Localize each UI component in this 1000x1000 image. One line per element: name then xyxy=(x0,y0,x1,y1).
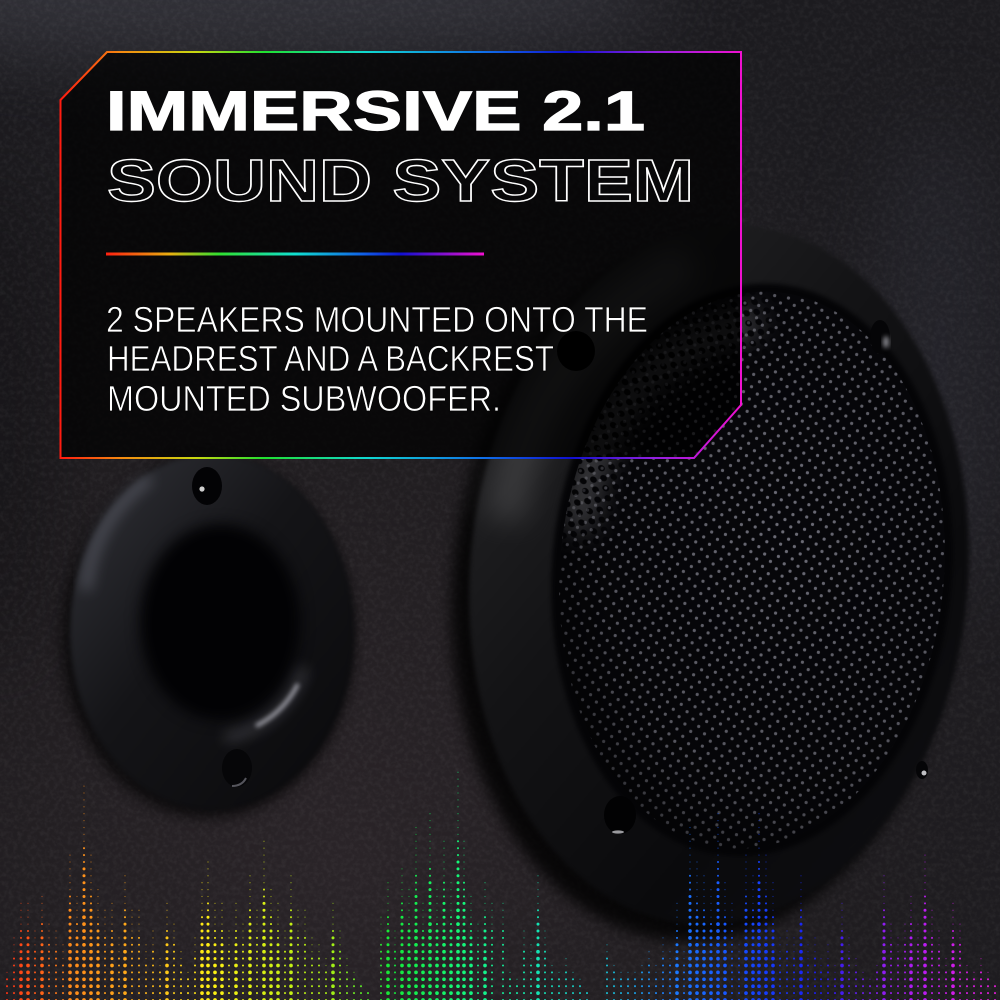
title line two, outlined: SOUND SYSTEM xyxy=(107,148,694,214)
body text: MOUNTED SUBWOOFER. xyxy=(107,378,501,419)
tweeter screws xyxy=(192,467,252,787)
speaker: large mesh woofer xyxy=(446,232,970,946)
speaker: round tweeter port xyxy=(62,454,354,818)
woofer outer ring xyxy=(440,205,998,945)
tweeter glint xyxy=(225,668,304,738)
title line one: IMMERSIVE 2.1 xyxy=(106,79,645,142)
panel: headline card xyxy=(60,52,741,458)
panel background and rainbow border xyxy=(60,52,741,458)
woofer ring highlight xyxy=(505,262,690,520)
rainbow divider xyxy=(106,252,484,256)
tweeter flange xyxy=(70,454,354,810)
tweeter shadow xyxy=(62,458,354,818)
woofer inner shadow groove xyxy=(528,267,976,873)
body text: 2 SPEAKERS MOUNTED ONTO THE xyxy=(106,299,648,340)
woofer shadow xyxy=(422,217,986,963)
body text: HEADREST AND A BACKREST xyxy=(107,338,554,379)
woofer screw holes xyxy=(557,320,928,834)
tweeter highlight xyxy=(86,478,150,590)
body text xyxy=(106,299,648,419)
woofer mesh grill xyxy=(536,275,968,865)
tweeter port hole xyxy=(140,524,300,720)
woofer mesh rim highlight xyxy=(564,298,772,542)
chart: rainbow dotted sound equalizer xyxy=(0,760,1000,1000)
